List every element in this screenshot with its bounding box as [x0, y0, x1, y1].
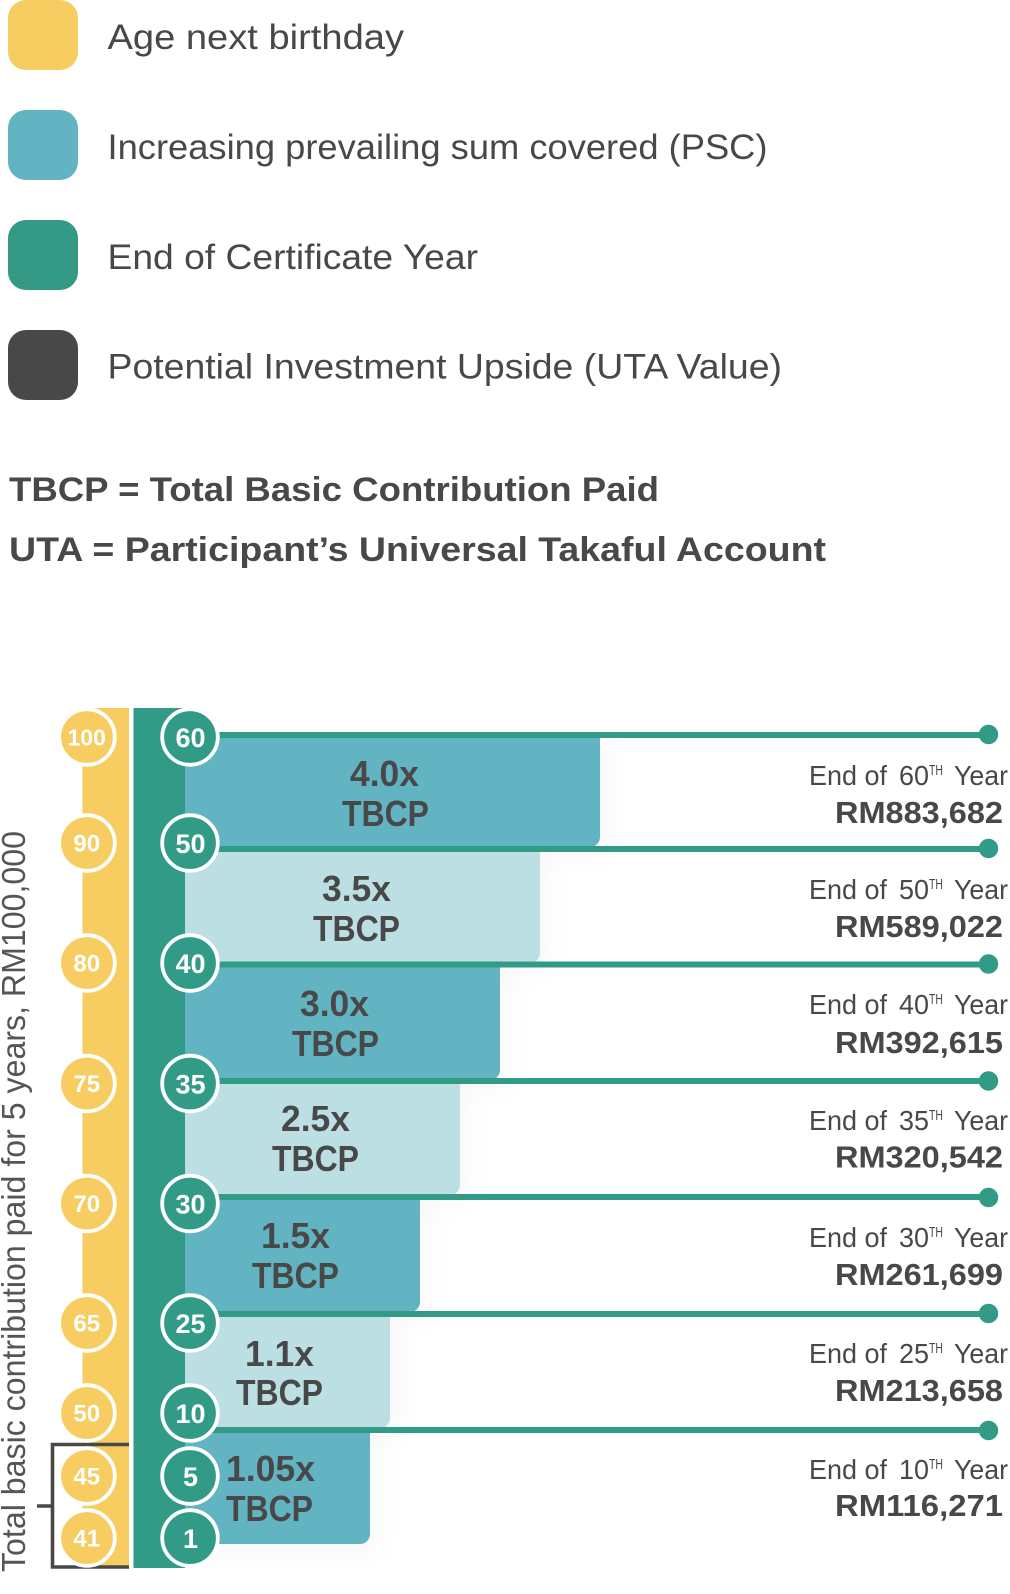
value: end of 60th year: 60: [899, 760, 929, 791]
label: 1.1x TBCP: TBCP: [236, 1372, 323, 1413]
leader line: 10: [190, 1421, 998, 1440]
label: 3.5x TBCP: TBCP: [313, 908, 400, 949]
value: end of 40th year: Year: [954, 989, 1008, 1020]
value: end of 50th year: 50: [899, 874, 929, 905]
block: 3.0x: [185, 965, 500, 1080]
value: end of 30th year: 30: [899, 1222, 929, 1253]
label: 1.1x TBCP: [236, 1333, 323, 1413]
value: end of 60th year: RM883,682: [835, 795, 1003, 830]
age 50: [59, 1385, 115, 1441]
age 70: [59, 1176, 115, 1231]
value: end of 50th year: TH: [929, 876, 943, 893]
year 50: 50: [175, 829, 206, 859]
age 80: [59, 935, 115, 991]
value: end of 60th year: TH: [929, 762, 943, 779]
label: 1.5x TBCP: [252, 1215, 339, 1296]
value: end of 10th year: 10: [899, 1454, 929, 1485]
value: end of 10th year: TH: [929, 1456, 943, 1473]
bracket: five-year contribution: [37, 1444, 129, 1567]
value: end of 10th year: RM116,271: [835, 1488, 1003, 1523]
legend: [8, 0, 782, 400]
value: end of 40th year: RM392,615: [835, 1025, 1003, 1060]
label: 2.5x TBCP: 2.5x: [281, 1098, 350, 1139]
age 100: 100: [68, 724, 106, 750]
age 80: 80: [73, 950, 100, 978]
year 5: 5: [183, 1462, 198, 1492]
age 65: [59, 1295, 115, 1351]
year 25: 25: [175, 1309, 206, 1339]
label: 1.5x TBCP: TBCP: [252, 1255, 339, 1296]
age 65: 65: [73, 1310, 100, 1338]
label: 3.0x TBCP: [292, 983, 379, 1064]
value: end of 35th year: End of: [809, 1105, 887, 1136]
value: end of 30th year: RM261,699: [835, 1257, 1003, 1292]
value: end of 10th year: End of: [809, 1454, 887, 1485]
multiple blocks: [185, 735, 600, 1544]
label: 2.5x TBCP: [272, 1098, 359, 1179]
value: end of 35th year: TH: [929, 1107, 943, 1124]
value: end of 50th year: RM589,022: [835, 909, 1003, 944]
leader line: 30: [190, 1188, 998, 1207]
value: end of 35th year: 35: [899, 1105, 929, 1136]
year end values: [809, 760, 1008, 1523]
block: 3.5x: [185, 849, 540, 963]
label: 3.5x TBCP: 3.5x: [322, 868, 391, 909]
label: 1.5x TBCP: 1.5x: [261, 1215, 330, 1256]
year 35: [162, 1056, 218, 1111]
year 35: 35: [175, 1070, 206, 1100]
certificate year bar: [134, 708, 185, 1568]
value: end of 10th year: [809, 1454, 1008, 1523]
value: end of 30th year: TH: [929, 1224, 943, 1241]
label: 1.05x TBCP: [226, 1448, 315, 1529]
value: end of 10th year: Year: [954, 1454, 1008, 1485]
age markers: [59, 709, 115, 1566]
year 10: [162, 1385, 218, 1441]
label: 4.0x TBCP: 4.0x: [350, 753, 419, 794]
year 1: [162, 1510, 218, 1566]
value: end of 25th year: TH: [929, 1340, 943, 1357]
leader line: 50: [190, 839, 998, 858]
value: end of 60th year: [809, 760, 1008, 830]
year 25: [162, 1295, 218, 1351]
value: end of 35th year: [809, 1105, 1008, 1174]
value: end of 35th year: RM320,542: [835, 1140, 1003, 1174]
value: end of 60th year: Year: [954, 760, 1008, 791]
definition: UTA: UTA = Participant’s Universal Takaful Account: [9, 531, 826, 569]
label: 3.0x TBCP: 3.0x: [300, 983, 369, 1024]
label: 1.05x TBCP: TBCP: [226, 1488, 313, 1529]
age 90: [59, 815, 115, 871]
legend item: age next birthday: Age next birthday: [108, 18, 405, 57]
value: end of 40th year: End of: [809, 989, 887, 1020]
certificate year markers: [162, 709, 218, 1566]
block: 4.0x: [185, 735, 600, 847]
year 5: [162, 1448, 218, 1504]
age 41: [59, 1510, 115, 1566]
label: 4.0x TBCP: [342, 753, 429, 834]
value: end of 40th year: TH: [929, 991, 943, 1008]
label: 1.05x TBCP: 1.05x: [226, 1448, 315, 1489]
leader line: 40: [190, 954, 998, 974]
leader line: 25: [190, 1304, 998, 1323]
age 75: 75: [73, 1071, 100, 1098]
block: 1.5x: [185, 1197, 420, 1312]
value: end of 25th year: RM213,658: [835, 1373, 1003, 1408]
label: 3.0x TBCP: TBCP: [292, 1023, 379, 1064]
age 41: 41: [73, 1526, 100, 1552]
year 60: [162, 709, 218, 765]
age bar: [82, 708, 129, 1568]
legend item: increasing prevailing sum covered: [8, 110, 767, 180]
legend item: age next birthday: [8, 0, 405, 70]
definitions text block: [9, 471, 826, 569]
legend item: end of certificate year: [8, 220, 478, 290]
block: 2.5x: [185, 1081, 460, 1195]
value: end of 60th year: End of: [809, 760, 887, 791]
age 90: 90: [73, 830, 100, 858]
legend item: end of certificate year: End of Certificate Year: [108, 238, 478, 277]
label: 3.5x TBCP: [313, 868, 400, 949]
value: end of 25th year: Year: [954, 1338, 1008, 1369]
age 45: [59, 1448, 115, 1504]
year 10: 10: [175, 1399, 206, 1429]
year 30: 30: [175, 1190, 206, 1220]
age 100: [59, 709, 115, 765]
value: end of 25th year: 25: [899, 1338, 929, 1369]
value: end of 35th year: Year: [954, 1105, 1008, 1136]
block: 1.05x: [185, 1430, 370, 1544]
value: end of 50th year: [809, 874, 1008, 944]
age 45: 45: [73, 1464, 100, 1490]
block: 1.1x: [185, 1314, 390, 1428]
legend item: potential investment upside: Potential Investment Upside (UTA Value): [108, 348, 782, 386]
definition: TBCP: TBCP = Total Basic Contribution Paid: [9, 471, 659, 509]
year 60: 60: [175, 723, 206, 753]
label: 4.0x TBCP: TBCP: [342, 793, 429, 834]
year 40: 40: [175, 949, 206, 979]
value: end of 30th year: Year: [954, 1222, 1008, 1253]
value: end of 30th year: [809, 1222, 1008, 1292]
legend item: increasing prevailing sum covered: Increasing prevailing sum covered (PSC): [108, 128, 767, 167]
label: 1.1x TBCP: 1.1x: [245, 1333, 314, 1374]
age 70: 70: [73, 1191, 100, 1218]
value: end of 50th year: End of: [809, 874, 887, 905]
leader line: 35: [190, 1071, 998, 1091]
year 50: [162, 815, 218, 871]
value: end of 40th year: 40: [899, 989, 929, 1020]
value: end of 30th year: End of: [809, 1222, 887, 1253]
year 30: [162, 1176, 218, 1231]
value: end of 25th year: End of: [809, 1338, 887, 1369]
age 75: [59, 1056, 115, 1111]
label: 2.5x TBCP: TBCP: [272, 1138, 359, 1179]
multiple labels: [226, 753, 429, 1529]
legend item: potential investment upside: [8, 330, 782, 400]
year 40: [162, 935, 218, 991]
year end leader lines: [190, 725, 998, 1440]
value: end of 40th year: [809, 989, 1008, 1060]
value: end of 50th year: Year: [954, 874, 1008, 905]
year 1: 1: [183, 1524, 198, 1554]
leader line: 60: [190, 725, 998, 744]
age 50: 50: [73, 1400, 100, 1428]
value: end of 25th year: [809, 1338, 1008, 1408]
